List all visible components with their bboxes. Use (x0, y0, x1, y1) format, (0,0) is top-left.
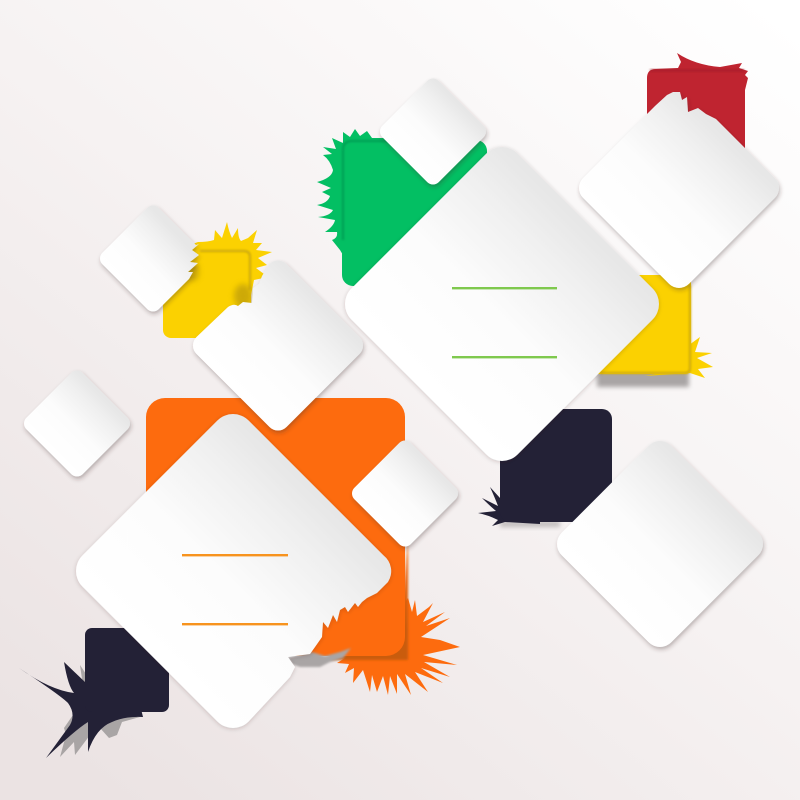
card: bottom right diamond (557, 441, 763, 647)
card: medium diamond with torn edge (193, 260, 363, 431)
green divider top (452, 287, 557, 289)
panel: red square with torn top (647, 53, 748, 180)
card: large diamond left with torn edge (76, 414, 391, 728)
panel: navy square upper (478, 409, 612, 527)
card: right diamond with torn top (579, 92, 779, 288)
panel: yellow square left with burst (163, 222, 272, 338)
orange divider top (182, 554, 288, 556)
panel: navy square lower with burst (19, 628, 169, 758)
orange divider bottom (182, 623, 288, 625)
panel: yellow square right (540, 275, 713, 387)
card: small diamond far left (24, 371, 130, 476)
panel: orange square with burst (146, 398, 460, 695)
card: large diamond center (345, 147, 659, 461)
card: small diamond over orange (352, 441, 458, 546)
card: small diamond left with torn edge (100, 206, 199, 311)
card: small diamond top (380, 79, 486, 184)
green divider bottom (452, 356, 557, 358)
panel: green square with burst (317, 129, 487, 286)
